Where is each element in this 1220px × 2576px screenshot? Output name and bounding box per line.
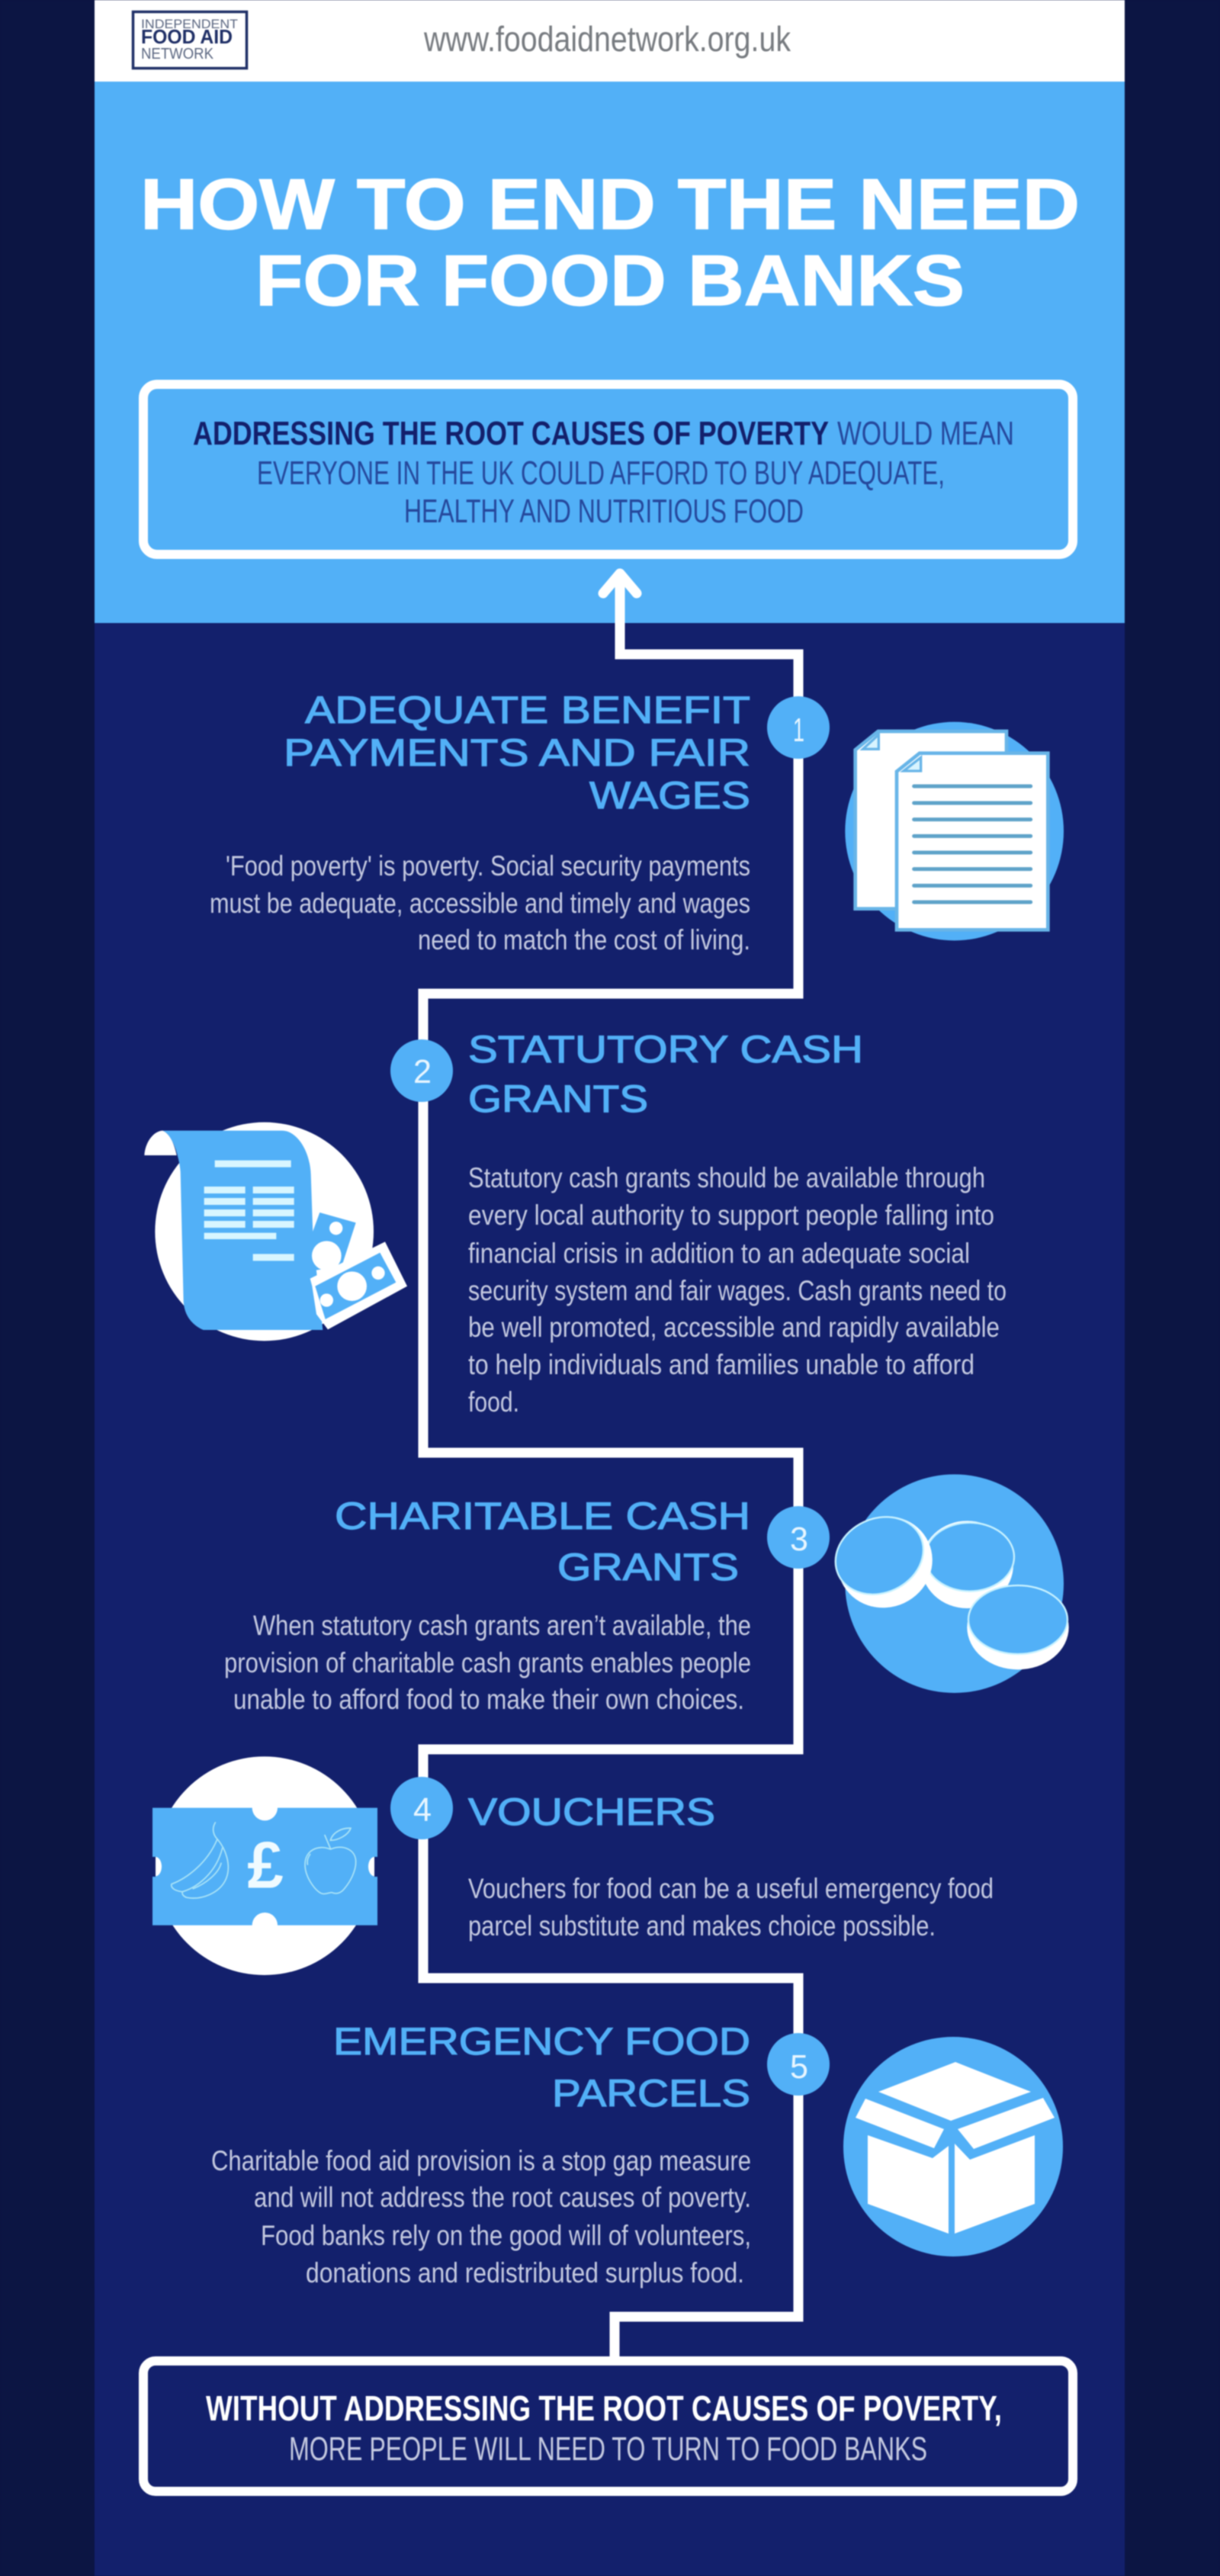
logo: Independent Food Aid Network: INDEPENDENT — [141, 17, 238, 31]
icon: documents — [845, 722, 1064, 940]
step 1 heading — [284, 689, 750, 817]
website address: www.foodaidnetwork.org.uk — [423, 19, 791, 59]
step 5 heading: PARCELS — [552, 2072, 750, 2115]
step 4 body text: Vouchers for food can be a useful emergency food — [468, 1873, 994, 1904]
step 3 number: 3 — [790, 1521, 808, 1558]
step 2 body text — [468, 1162, 1006, 1418]
step 1 heading: ADEQUATE BENEFIT — [305, 689, 750, 731]
step 4 body text — [468, 1873, 994, 1942]
step 4 body text: parcel substitute and makes choice possible. — [468, 1910, 936, 1942]
panel: light blue title area — [95, 82, 1125, 623]
step 1 heading: PAYMENTS AND FAIR — [284, 731, 750, 774]
title: FOR FOOD BANKS — [255, 240, 965, 320]
step 5 heading: EMERGENCY FOOD — [333, 2020, 750, 2063]
step 3 body text — [224, 1610, 751, 1715]
step 2 number — [390, 1039, 453, 1102]
step 3 body text: When statutory cash grants aren’t available, the — [253, 1610, 751, 1641]
panel: dark main background — [95, 623, 1125, 2576]
step 3 heading: GRANTS — [557, 1546, 739, 1588]
step 2 body text: security system and fair wages. Cash grants need to — [468, 1275, 1006, 1306]
step 2 body text: food. — [468, 1386, 519, 1418]
step 2 body text: be well promoted, accessible and rapidly available — [468, 1312, 1000, 1343]
step 3 body text: unable to afford food to make their own choices. — [233, 1684, 744, 1715]
step 1 body text: need to match the cost of living. — [418, 924, 750, 956]
step 5 number — [767, 2033, 830, 2096]
callout: root causes box — [143, 384, 1073, 554]
step 1 number — [767, 696, 830, 759]
step 1 body text — [210, 850, 750, 956]
icon: food voucher — [152, 1756, 378, 1975]
icon: bill and banknotes — [144, 1123, 407, 1341]
step 5 body text — [211, 2145, 751, 2289]
icon: open box — [843, 2037, 1063, 2256]
title — [140, 164, 1080, 320]
callout: root causes box: HEALTHY AND NUTRITIOUS FOOD — [404, 493, 804, 530]
callout: root causes box: ADDRESSING THE ROOT CAUSES OF POVERTY — [193, 415, 829, 452]
step 5 body text: donations and redistributed surplus food. — [306, 2257, 744, 2289]
step 2 heading — [468, 1028, 863, 1120]
logo: Independent Food Aid Network — [133, 12, 247, 69]
callout: closing box: WITHOUT ADDRESSING THE ROOT CAUSES OF POVERTY, — [206, 2388, 1002, 2428]
arrow: pathway line from bottom box up to top box — [423, 573, 798, 2359]
step 1 number: 1 — [793, 711, 804, 749]
step 3 heading — [335, 1495, 750, 1588]
step 2 heading: GRANTS — [468, 1078, 648, 1120]
step 5 number: 5 — [790, 2048, 808, 2086]
step 4 number: 4 — [413, 1791, 432, 1829]
icon: coins — [823, 1474, 1069, 1693]
step 2 body text: financial crisis in addition to an adequate social — [468, 1238, 970, 1269]
step 4 heading: VOUCHERS — [468, 1791, 715, 1833]
callout: root causes box: WOULD MEAN — [837, 415, 1014, 452]
step 5 body text: and will not address the root causes of poverty. — [254, 2182, 751, 2213]
step 3 heading: CHARITABLE CASH — [335, 1495, 750, 1537]
step 2 heading: STATUTORY CASH — [468, 1028, 863, 1071]
step 2 body text: every local authority to support people falling into — [468, 1200, 994, 1231]
step 5 body text: Food banks rely on the good will of volunteers, — [261, 2220, 751, 2251]
logo: Independent Food Aid Network: NETWORK — [141, 46, 214, 63]
panel: header strip — [95, 0, 1125, 82]
step 3 number — [767, 1506, 830, 1569]
callout: root causes box: EVERYONE IN THE UK COULD AFFORD TO BUY ADEQUATE, — [257, 454, 945, 492]
step 5 body text: Charitable food aid provision is a stop gap measure — [211, 2145, 751, 2176]
step 2 number: 2 — [413, 1053, 432, 1090]
step 1 body text: 'Food poverty' is poverty. Social security payments — [226, 850, 750, 882]
callout: closing box: MORE PEOPLE WILL NEED TO TURN TO FOOD BANKS — [289, 2430, 927, 2468]
logo: Independent Food Aid Network: FOOD AID — [141, 25, 233, 48]
step 5 heading — [333, 2020, 750, 2115]
step 1 body text: must be adequate, accessible and timely and wages — [210, 888, 750, 919]
callout: closing box — [143, 2361, 1073, 2491]
step 2 body text: Statutory cash grants should be available through — [468, 1162, 985, 1193]
icon: food voucher: £ — [247, 1829, 284, 1902]
title: HOW TO END THE NEED — [140, 164, 1080, 244]
step 1 heading: WAGES — [589, 774, 750, 817]
step 2 body text: to help individuals and families unable to afford — [468, 1349, 974, 1380]
step 4 number — [390, 1777, 453, 1839]
step 3 body text: provision of charitable cash grants enables people — [224, 1647, 751, 1678]
